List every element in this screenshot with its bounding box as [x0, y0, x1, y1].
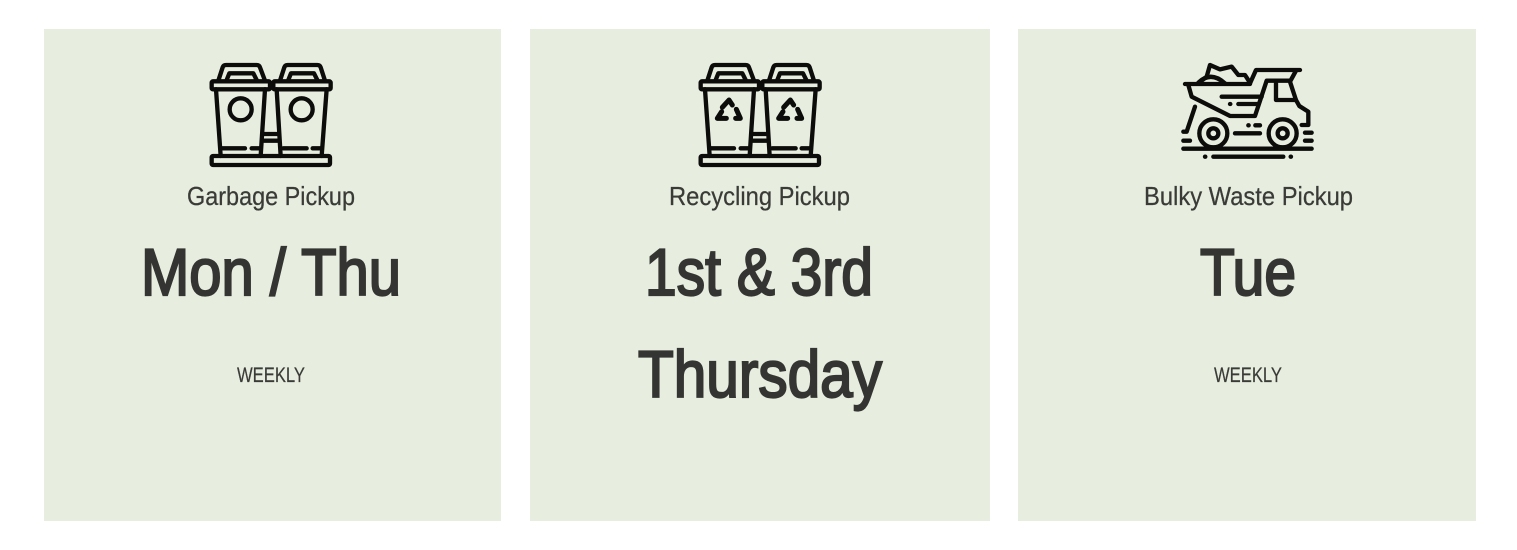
icon: two garbage bins [212, 65, 331, 165]
schedule: first and third thursday: 1st & 3rd [645, 235, 873, 309]
schedule: first and third thursday [638, 235, 882, 411]
label: bulky waste pickup: Bulky Waste Pickup [1144, 181, 1353, 211]
schedule: mon thu: Mon / Thu [141, 235, 401, 309]
frequency: weekly: WEEKLY [237, 364, 305, 387]
panel: garbage pickup [44, 29, 501, 521]
schedule: first and third thursday: Thursday [638, 337, 882, 411]
icon: dump truck [1183, 65, 1312, 157]
label: recycling pickup: Recycling Pickup [669, 181, 850, 211]
label: garbage pickup: Garbage Pickup [187, 181, 355, 211]
panel: bulky waste pickup [1018, 29, 1476, 521]
panel: recycling pickup [530, 29, 990, 521]
schedule: tuesday: Tue [1200, 235, 1296, 309]
icon: two recycling bins [701, 65, 820, 165]
frequency: weekly: WEEKLY [1214, 364, 1282, 387]
